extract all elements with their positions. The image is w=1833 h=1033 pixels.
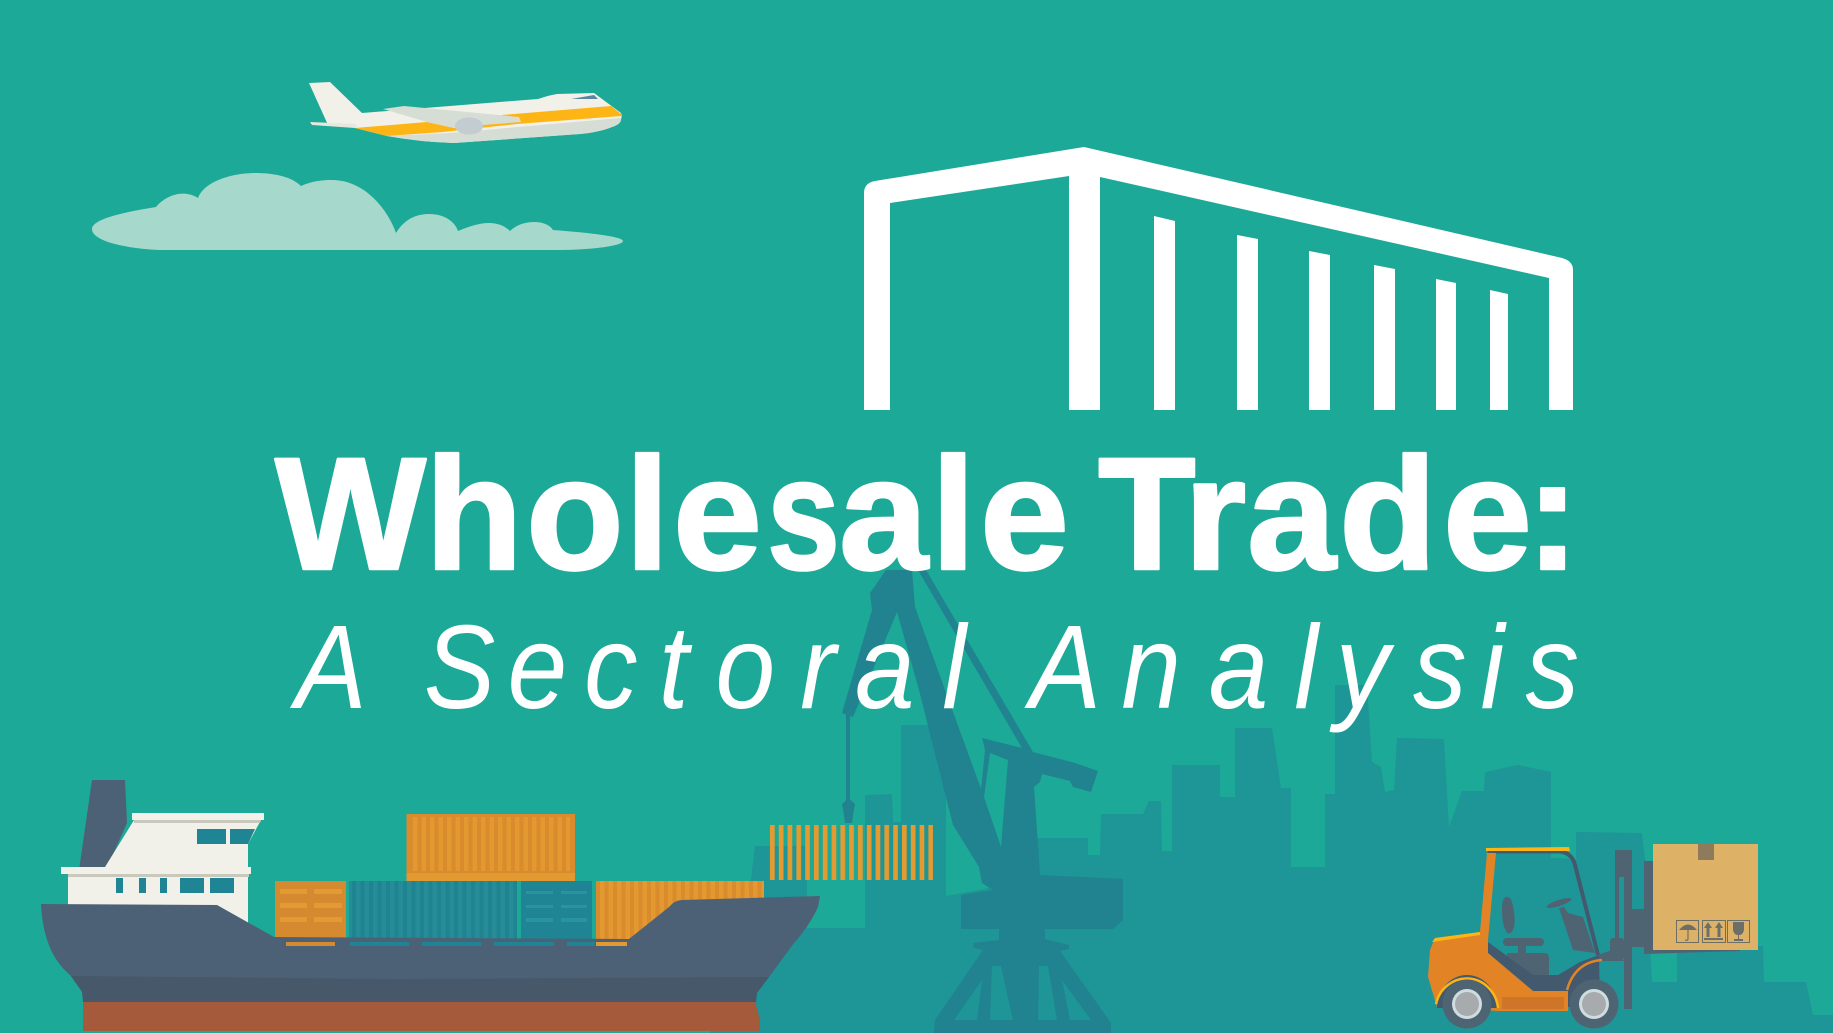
plane engine — [455, 118, 483, 134]
plane yellow stripe — [355, 106, 621, 136]
rear wheel — [1442, 980, 1492, 1028]
port crane silhouette — [842, 570, 1123, 1033]
orange container right — [596, 881, 764, 941]
front wheel — [1570, 980, 1618, 1028]
crane tower, machine house and legs — [934, 760, 1123, 1033]
fork carriage and mast — [1598, 850, 1740, 1009]
orange container top — [406, 814, 575, 881]
cardboard box — [1653, 844, 1758, 950]
title: ale Trade: — [839, 424, 1579, 603]
title: Whole — [275, 424, 762, 603]
seat — [1502, 897, 1549, 976]
subtitle: A Sectoral Analysis — [290, 601, 1579, 733]
hull red bottom — [83, 1002, 760, 1031]
plane wing — [383, 106, 521, 128]
ship bridge — [105, 813, 264, 873]
ship funnel — [79, 780, 127, 870]
plane fuselage — [355, 93, 622, 143]
box handling icons — [1676, 920, 1750, 942]
cab roof post — [1488, 852, 1598, 955]
crane leg openings — [954, 966, 1091, 1020]
airplane — [309, 82, 622, 143]
plane tail fin — [309, 82, 370, 125]
city skyline silhouette — [710, 685, 1833, 1033]
rear wheel arch — [1436, 975, 1498, 1008]
crane hook cable — [842, 713, 855, 823]
title: s — [767, 426, 840, 604]
plane stabilizer — [310, 122, 357, 128]
orange container left — [275, 881, 346, 939]
title — [275, 424, 1579, 604]
hull dark band — [71, 976, 769, 1002]
front wheel arch line — [1567, 960, 1602, 990]
forklift — [1428, 844, 1758, 1028]
cab roof — [1486, 847, 1570, 851]
plane belly — [387, 118, 621, 143]
ship hull — [41, 896, 820, 982]
ship lower cabin — [61, 867, 251, 934]
side panel — [1502, 997, 1564, 1009]
cloud — [92, 173, 623, 250]
forklift orange body — [1428, 853, 1568, 1011]
teal container middle — [349, 881, 517, 939]
hanging container — [770, 825, 933, 880]
crane thin strut — [918, 570, 1033, 752]
forklift dark underbody — [1488, 942, 1600, 1007]
crane head — [981, 738, 1098, 797]
cargo ship — [41, 780, 820, 1031]
plane cockpit window — [571, 95, 598, 99]
crane main beam and arm — [842, 570, 1010, 890]
teal container right — [521, 881, 592, 939]
warehouse outline icon — [864, 147, 1573, 410]
hood highlight — [1432, 932, 1480, 942]
steering column — [1546, 896, 1595, 953]
deck slots — [286, 942, 627, 946]
